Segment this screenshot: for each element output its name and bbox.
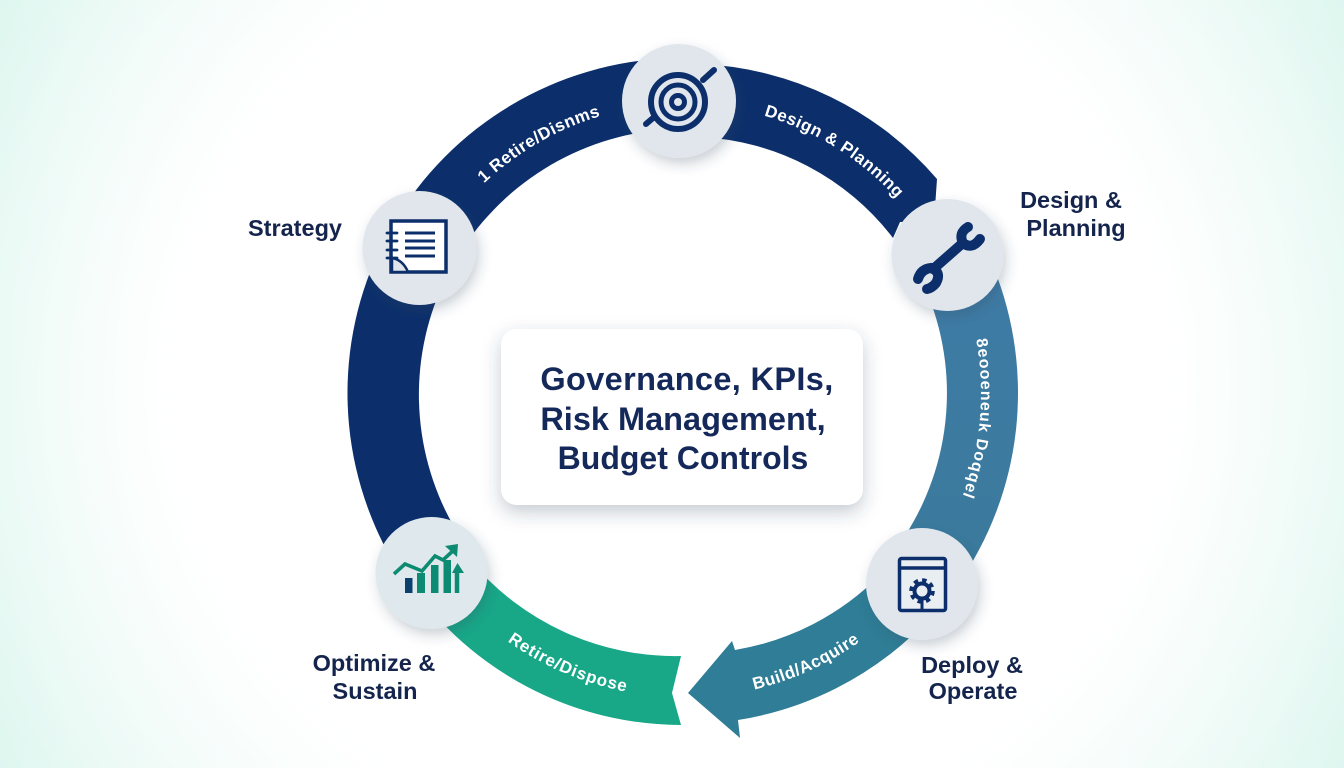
band: right blue arc [908,279,1018,561]
icon: deploy window with gear [866,528,978,640]
band: design and planning arrow [721,66,937,238]
icon: notebook [362,191,476,305]
label: Optimize & Sustain: Sustain [333,678,417,704]
label: Design & Planning: Planning [1026,215,1126,241]
band label: Retire/Dispose: Retire/Dispose [508,632,626,691]
icon: target [622,44,736,158]
label: Strategy: Strategy [248,215,342,241]
label: Optimize & Sustain: Optimize & [313,650,435,676]
band: left navy arc [348,60,639,544]
band label: garbled right text: 8eooeneuk Doqqel [963,338,991,499]
band: build/acquire arrow [688,588,909,738]
icon: growth chart [376,517,488,629]
label: Design & Planning: Design & [1020,187,1122,213]
band label: Design & Planning: Design & Planning [765,104,902,198]
panel: center card [501,329,863,505]
band label: Retire/Disnms: 1 Retire/Disnms [478,108,599,183]
band: green retire/dispose [446,578,681,725]
center card text: Governance, KPIs, [540,361,834,397]
icon: wrench [892,199,1004,311]
center card text: Risk Management, [540,401,826,437]
band label: Build/Acquire: Build/Acquire [752,636,858,690]
label: Deploy & Operate: Deploy & [921,652,1023,678]
label: Deploy & Operate: Operate [929,678,1017,704]
center card text: Budget Controls [558,440,808,476]
